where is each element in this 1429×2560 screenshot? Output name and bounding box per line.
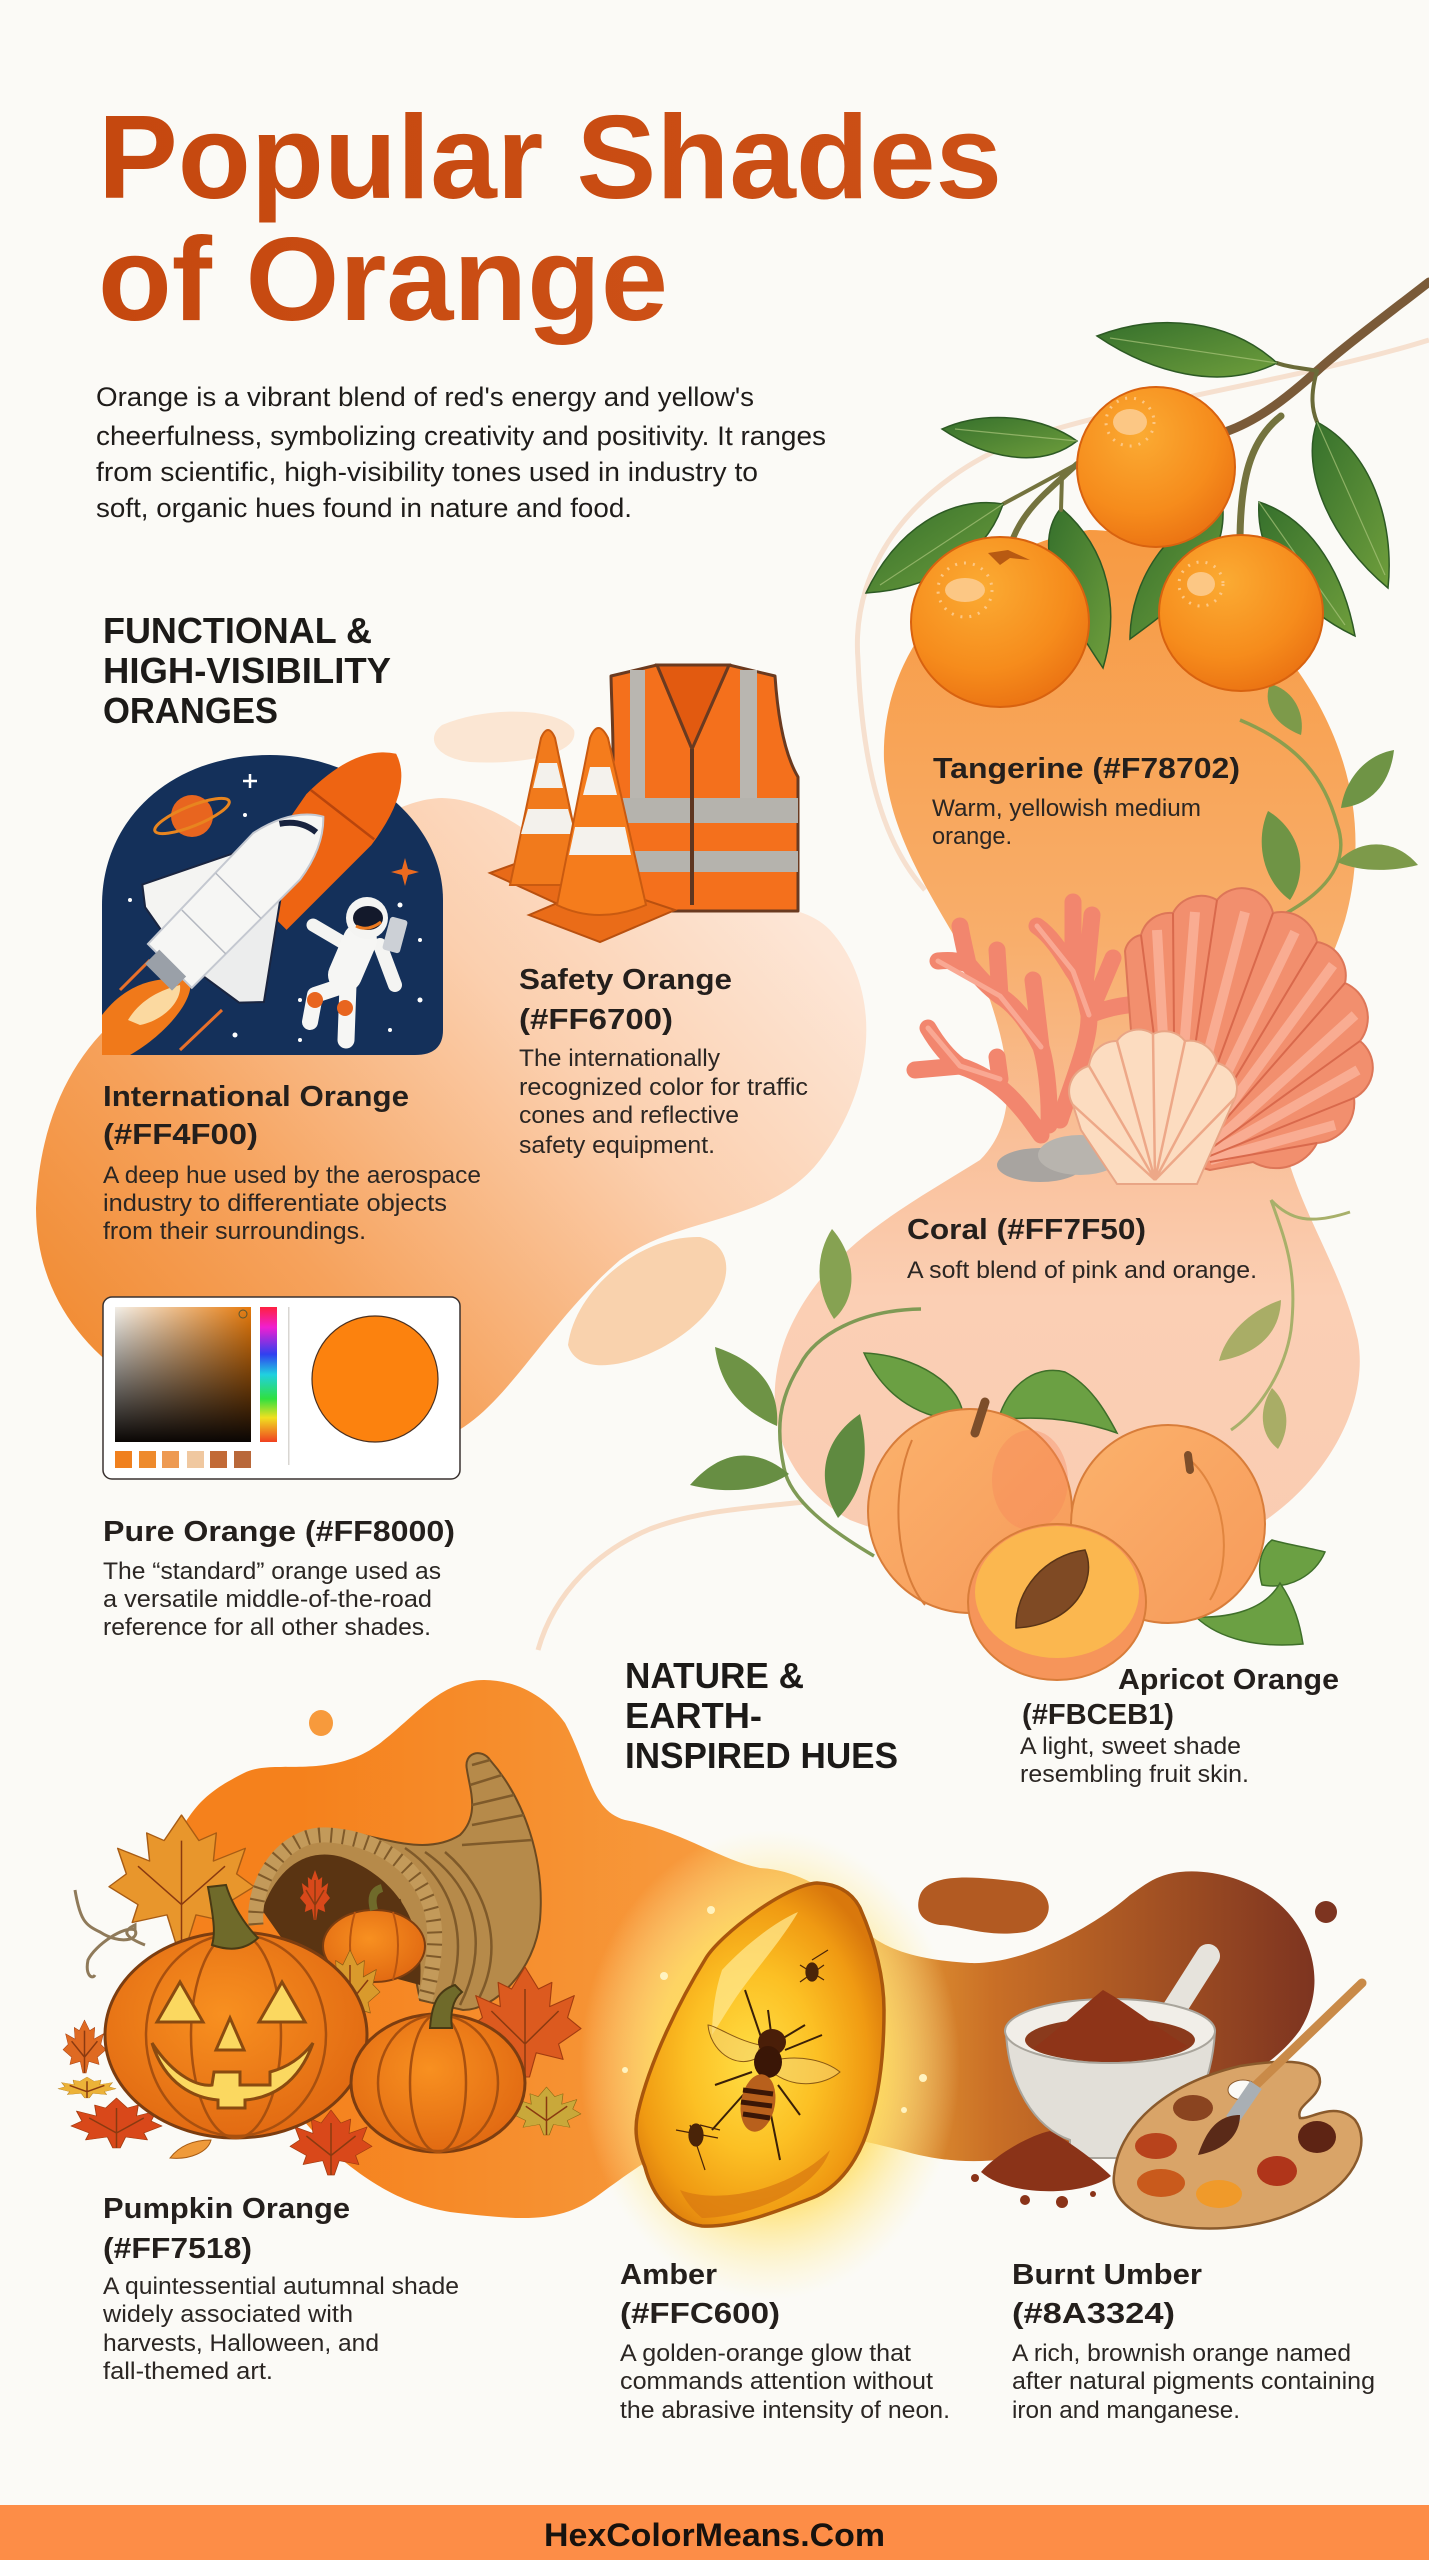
cone back <box>490 730 620 905</box>
title <box>98 91 1002 346</box>
text: coral <box>907 1214 1257 1284</box>
text: pure orange: reference for all other shades. <box>103 1614 431 1641</box>
illustration: safety vest and cones <box>490 665 798 942</box>
text: burnt umber: iron and manganese. <box>1012 2397 1240 2424</box>
palette <box>1114 2062 1361 2229</box>
hue strip <box>260 1307 277 1442</box>
text: burnt umber: Burnt Umber <box>1012 2259 1202 2291</box>
text: amber: (#FFC600) <box>620 2298 780 2330</box>
orange right <box>1159 535 1323 691</box>
text: apricot orange: Apricot Orange <box>1118 1664 1339 1696</box>
stones <box>997 1135 1122 1182</box>
vine: right of tangerine <box>1240 684 1418 916</box>
flame <box>102 979 191 1055</box>
text: international orange: from their surroundings. <box>103 1218 366 1245</box>
text: amber: A golden-orange glow that <box>620 2340 911 2367</box>
powder pile <box>971 2131 1111 2208</box>
small pumpkin in horn <box>323 1888 425 1982</box>
text: apricot orange <box>1020 1664 1339 1788</box>
decorative curve upper <box>857 340 1429 890</box>
coral branches <box>915 902 1145 1135</box>
back maple leaf <box>109 1815 254 1943</box>
apricot half with pit <box>968 1524 1146 1680</box>
glow <box>580 1830 960 2300</box>
blob: bottom band background <box>162 1680 1337 2218</box>
text: safety orange <box>519 964 808 1159</box>
apricot right <box>1071 1425 1265 1623</box>
text: coral: Coral (#FF7F50) <box>907 1214 1146 1246</box>
text: international orange: A deep hue used by the aerospace <box>103 1162 481 1189</box>
face <box>152 1982 313 2108</box>
heading: functional oranges: HIGH-VISIBILITY <box>103 650 391 691</box>
leaves <box>866 323 1389 636</box>
pestle <box>1161 1956 1208 2030</box>
illustration: tangerines on branch <box>866 282 1429 707</box>
heading: nature oranges: EARTH- <box>625 1695 762 1736</box>
paint brush <box>1198 1983 1362 2155</box>
vine: left of apricots <box>690 1229 921 1556</box>
text: safety orange: safety equipment. <box>519 1132 715 1159</box>
text: burnt umber <box>1012 2259 1375 2424</box>
branches <box>1003 282 1429 550</box>
big scallop shell <box>1125 888 1373 1170</box>
heading: nature oranges: NATURE & <box>625 1655 804 1696</box>
text: burnt umber: after natural pigments containing <box>1012 2368 1375 2395</box>
text: coral: A soft blend of pink and orange. <box>907 1257 1257 1284</box>
stone <box>636 1883 884 2226</box>
illustration: mortar, pestle and palette <box>971 1956 1362 2229</box>
text: apricot orange: (#FBCEB1) <box>1022 1699 1174 1731</box>
text: tangerine <box>932 753 1240 850</box>
illustration: apricots <box>864 1353 1325 1680</box>
text: pumpkin orange: (#FF7518) <box>103 2233 252 2265</box>
heading: functional oranges: ORANGES <box>103 690 278 731</box>
illustration: space shuttle and astronaut <box>102 752 443 1055</box>
text: amber <box>620 2259 950 2424</box>
text: safety orange: (#FF6700) <box>519 1004 673 1036</box>
cone front <box>529 728 675 942</box>
text: apricot orange: A light, sweet shade <box>1020 1733 1241 1760</box>
text: safety orange: recognized color for traffic <box>519 1074 808 1101</box>
jack-o-lantern <box>105 1885 367 2138</box>
text: pumpkin orange <box>102 2193 459 2385</box>
text: international orange: (#FF4F00) <box>103 1119 258 1151</box>
text: amber: commands attention without <box>620 2368 933 2395</box>
text: safety orange: The internationally <box>519 1045 720 1072</box>
text: burnt umber: (#8A3324) <box>1012 2298 1175 2330</box>
apricot left <box>868 1402 1072 1613</box>
text: apricot orange: resembling fruit skin. <box>1020 1761 1249 1788</box>
intro paragraph: from scientific, high-visibility tones used in industry to <box>96 457 758 487</box>
small swatches <box>115 1451 251 1468</box>
text: pure orange: a versatile middle-of-the-road <box>103 1586 432 1613</box>
intro paragraph: cheerfulness, symbolizing creativity and positivity. It ranges <box>96 421 826 451</box>
fallen leaf <box>170 2140 211 2158</box>
text: burnt umber: A rich, brownish orange named <box>1012 2340 1351 2367</box>
planet <box>151 792 233 840</box>
text: international orange: industry to differentiate objects <box>103 1190 447 1217</box>
text: safety orange: cones and reflective <box>519 1102 739 1129</box>
orange centre <box>1077 387 1235 547</box>
text: amber: the abrasive intensity of neon. <box>620 2397 950 2424</box>
text: pumpkin orange: harvests, Halloween, and <box>103 2330 379 2357</box>
title: Popular Shades <box>98 91 1002 224</box>
bee <box>708 1990 840 2160</box>
text: pure orange <box>103 1516 455 1641</box>
vine: right of coral <box>1219 1200 1350 1449</box>
blob: tangerine to apricot background <box>775 530 1360 1555</box>
title: of Orange <box>98 213 668 346</box>
text: pumpkin orange: A quintessential autumnal shade <box>103 2273 459 2300</box>
text: tangerine: orange. <box>932 823 1012 850</box>
text: safety orange: Safety Orange <box>519 964 732 996</box>
heading: functional oranges <box>103 610 391 731</box>
text: tangerine: Warm, yellowish medium <box>932 795 1201 822</box>
paint dabs <box>1135 2095 1336 2208</box>
color picker card <box>103 1297 460 1479</box>
text: tangerine: Tangerine (#F78702) <box>933 753 1240 785</box>
illustration: coral and shells <box>915 888 1373 1184</box>
pumpkin right <box>351 1985 525 2152</box>
footer bar: HexColorMeans.Com <box>544 2517 885 2553</box>
text: pumpkin orange: Pumpkin Orange <box>103 2193 350 2225</box>
intro paragraph: Orange is a vibrant blend of red's energy and yellow's <box>96 382 754 412</box>
text: international orange <box>103 1081 481 1245</box>
back leaves <box>1049 508 1223 668</box>
mortar bowl <box>1005 1990 1215 2158</box>
intro paragraph <box>96 382 826 523</box>
text: pure orange: The “standard” orange used as <box>103 1558 441 1585</box>
cornucopia <box>254 1753 541 2010</box>
text: international orange: International Orange <box>103 1081 409 1113</box>
orange swatch circle <box>312 1316 438 1442</box>
sparkles <box>622 1906 927 2113</box>
heading: nature oranges: INSPIRED HUES <box>625 1735 898 1776</box>
small scallop shell <box>1069 1030 1237 1184</box>
heading: functional oranges: FUNCTIONAL & <box>103 610 372 651</box>
footer bar <box>0 2505 1429 2560</box>
blob: functional oranges background <box>36 712 866 1440</box>
intro paragraph: soft, organic hues found in nature and food. <box>96 493 632 523</box>
vine curl <box>75 1890 145 1977</box>
heading: nature oranges <box>625 1655 898 1776</box>
decorative curve lower <box>538 1502 804 1650</box>
vest <box>611 665 798 911</box>
illustration: amber stone with bee <box>580 1830 960 2300</box>
astronaut <box>307 897 408 1040</box>
illustration: pumpkins and cornucopia <box>58 1753 581 2175</box>
orange left <box>911 537 1089 707</box>
text: pumpkin orange: widely associated with <box>102 2301 353 2328</box>
text: pumpkin orange: fall-themed art. <box>103 2358 273 2385</box>
text: pure orange: Pure Orange (#FF8000) <box>103 1516 455 1548</box>
small insects <box>676 1950 828 2170</box>
text: amber: Amber <box>620 2259 717 2291</box>
shuttle <box>104 692 454 1042</box>
picker gradient square <box>115 1307 251 1442</box>
leaves <box>864 1353 1325 1645</box>
